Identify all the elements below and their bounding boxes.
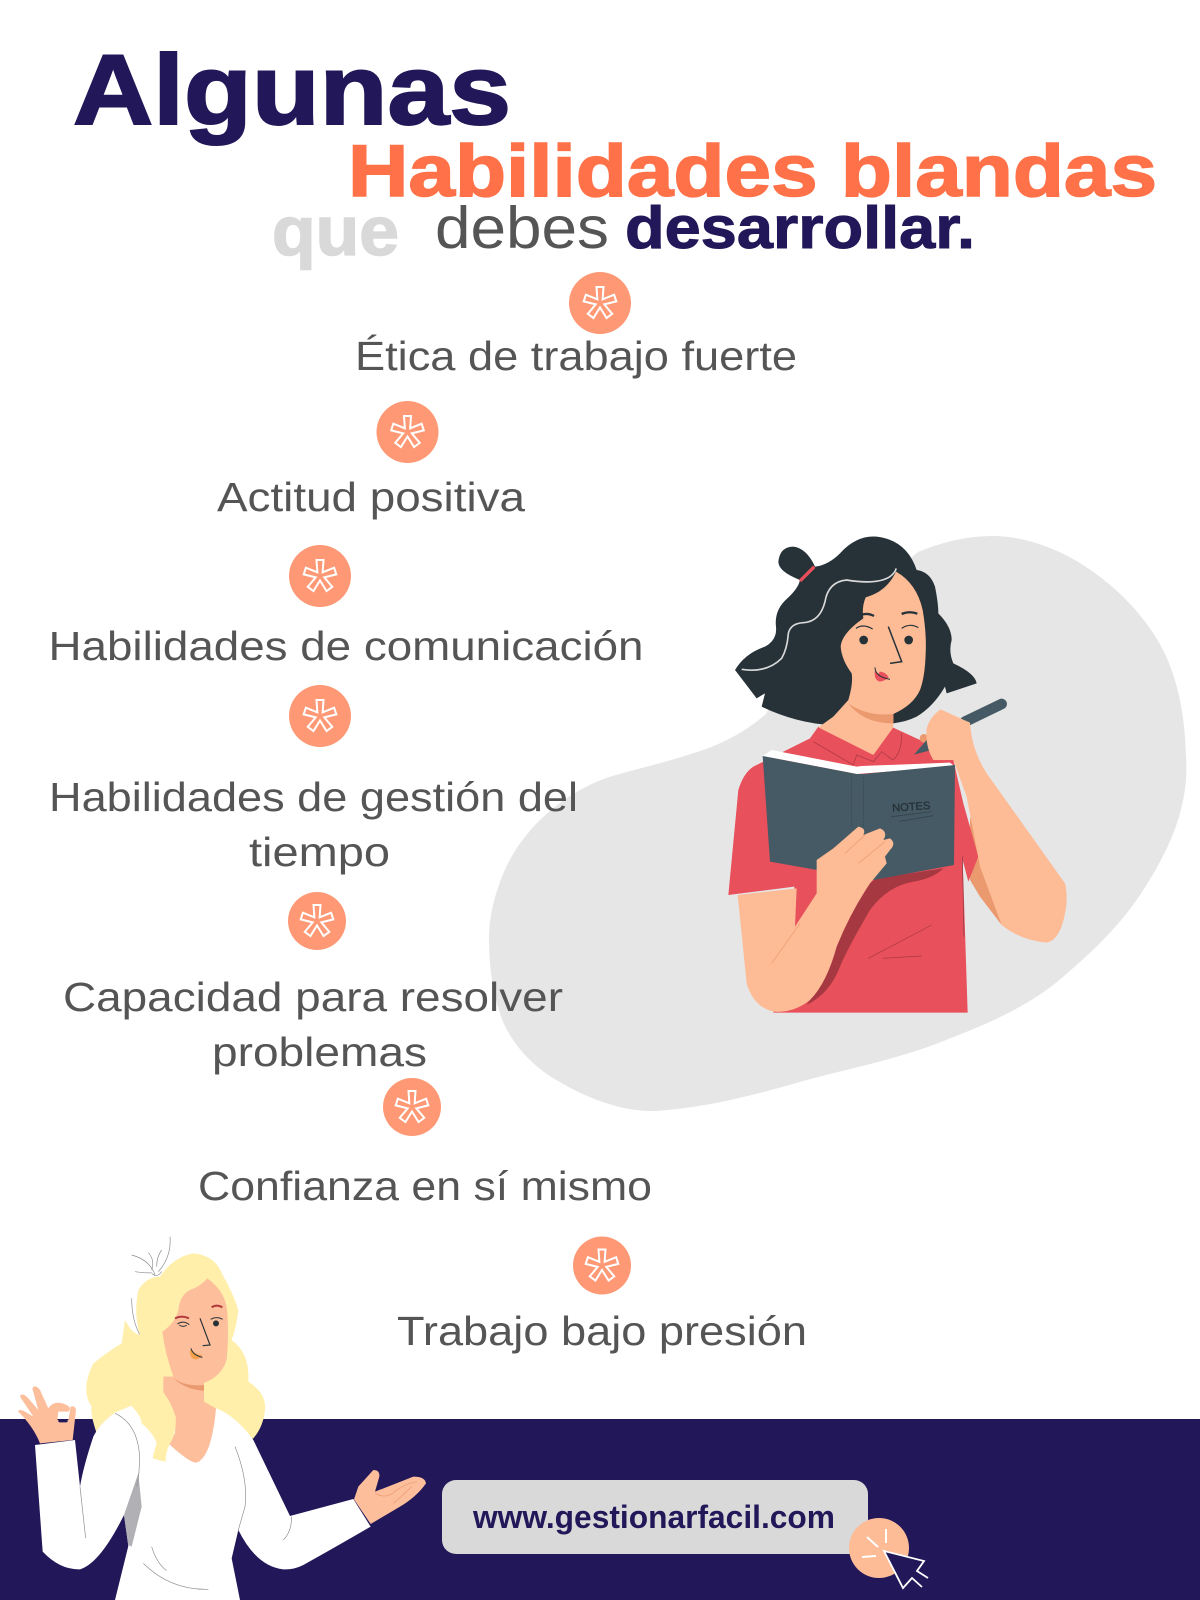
- label: Capacidad para resolver: [63, 974, 563, 1020]
- skill 1: Ética de trabajo fuerte: [355, 272, 797, 379]
- label: Ética de trabajo fuerte: [355, 333, 797, 379]
- label: Trabajo bajo presión: [397, 1308, 807, 1354]
- title word: debes: debes: [435, 195, 609, 261]
- icon: asterisk badge: [289, 685, 351, 747]
- label: tiempo: [249, 829, 390, 875]
- icon: click cursor: [849, 1518, 928, 1588]
- icon: asterisk badge: [573, 1236, 631, 1294]
- title word: desarrollar: desarrollar.: [625, 195, 975, 261]
- title: [73, 34, 1157, 270]
- skill 2: Actitud positiva: [217, 401, 525, 520]
- skill 7: Trabajo bajo presión: [397, 1236, 807, 1354]
- skill 3: Habilidades de comunicación: [48, 545, 644, 669]
- website url: www.gestionarfacil.com: [472, 1499, 835, 1535]
- illustration: woman with notebook: [728, 537, 1067, 1013]
- icon: asterisk badge: [288, 892, 346, 950]
- label: problemas: [212, 1029, 427, 1075]
- icon: asterisk badge: [383, 1078, 441, 1136]
- label: Habilidades de gestión del: [49, 774, 578, 820]
- label: Actitud positiva: [217, 474, 525, 520]
- skill 6: Confianza en sí mismo: [198, 1078, 652, 1209]
- skill 4: Habilidades de gestión del tiempo: [49, 685, 578, 875]
- skill 5: Capacidad para resolver problemas: [63, 892, 563, 1075]
- label: Habilidades de comunicación: [48, 623, 644, 669]
- notes label on cover: NOTES: [892, 800, 931, 815]
- icon: asterisk badge: [569, 272, 631, 334]
- title line: Habilidades blandas: Habilidades blandas: [348, 131, 1157, 212]
- background blob: [489, 536, 1186, 1111]
- footer band: [0, 1419, 1200, 1600]
- illustration: blonde woman: [18, 1237, 426, 1600]
- icon: asterisk badge: [289, 545, 351, 607]
- title word: que: que: [272, 192, 399, 270]
- label: Confianza en sí mismo: [198, 1163, 652, 1209]
- icon: asterisk badge: [376, 401, 438, 463]
- website button: [442, 1480, 868, 1554]
- title line: Algunas: Algunas: [73, 34, 511, 145]
